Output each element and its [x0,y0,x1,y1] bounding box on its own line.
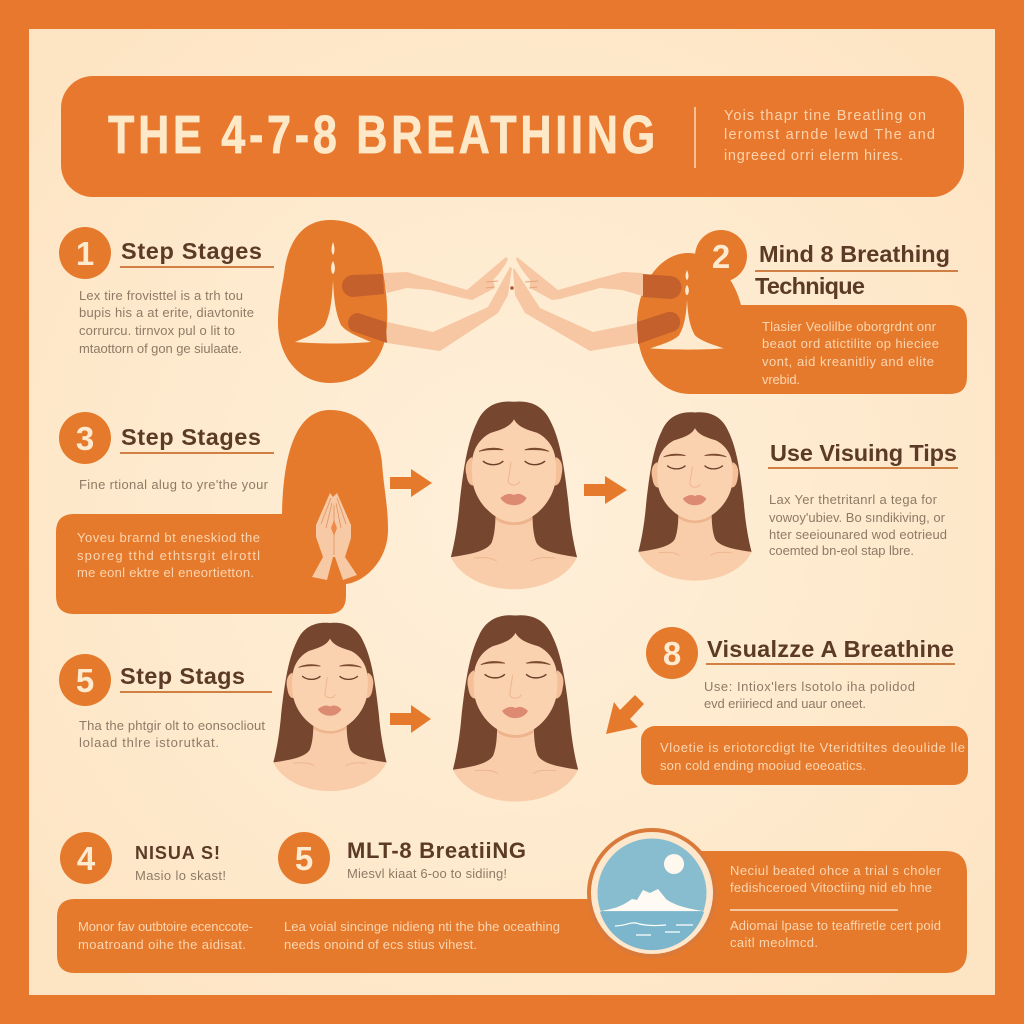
step 2 badge: 2 [712,238,730,275]
arrow 4 diagonal [606,695,644,734]
step 1 body [79,288,254,356]
face 1 [451,402,577,589]
header description: Yois thapr tine Breatling on [724,108,926,124]
step 1 badge: 1 [76,235,94,272]
arrow 3 [390,705,431,733]
arrow 1 [390,469,432,497]
step 4 badge: 4 [77,840,96,877]
face 4 [453,615,578,802]
left column text: Monor fav outbtoire ecenccote- [78,919,253,934]
bottom panel [57,851,967,973]
header description [724,108,935,164]
step 4 heading: NISUA S! [135,843,220,863]
step 8 heading: Visualzze A Breathine [707,636,954,662]
panel text [77,530,260,580]
tips body: hter seeiounared wod eotrieud [769,527,947,542]
step 3 body: Fine rtional alug to yre'the your [79,477,269,492]
face 3 [273,623,387,791]
right column text: caitl meolmcd. [730,935,818,950]
step 5 body: lolaad thlre istorutkat. [79,735,219,750]
panel text [762,319,939,387]
step 1 body: Lex tire frovisttel is a trh tou [79,288,243,303]
step 2 badge [695,230,747,282]
step 4 badge [60,832,112,884]
right column text [730,863,942,950]
icon: mountain and sea [587,828,717,958]
tips body: Lax Yer thetritanrl a tega for [769,492,938,507]
tips heading: Use Visuing Tips [770,440,957,466]
step 8 body: evd eriiriecd and uaur oneet. [704,696,866,711]
step 8 body [704,679,915,711]
step 8 panel: Vloetie is eriotorcdigt lte Vteridtiltes deoulide lle [660,740,965,755]
step 8 body: Use: Intiox'lers lsotolo iha polidod [704,679,915,694]
step 1 body: corrurcu. tirnvox pul o lit to [79,323,235,338]
step 5 badge [59,654,111,706]
step 5 body [79,718,265,750]
step 1 heading: Step Stages [121,238,262,264]
step 5 body: Tha the phtgir olt to eonsocliout [79,718,265,733]
middle column text: Lea voial sincinge nidieng nti the bhe oceathing [284,919,560,934]
step 8 badge: 8 [663,635,681,672]
panel text: me eonl ektre el eneortietton. [77,565,254,580]
step 1 blob with lamp [278,220,387,383]
header description: leromst arnde lewd The and [724,127,935,143]
title: THE 4-7-8 BREATHIING [108,106,655,165]
step 8 panel [641,726,968,785]
step 2 heading: Technique [755,273,865,299]
panel text: beaot ord atictilite op hieciee [762,336,939,351]
face 2 [638,412,752,581]
panel text: Tlasier Veolilbe oborgrdnt onr [762,319,937,334]
right arms [513,257,682,351]
step 4 sub text: Masio lo skast! [135,868,226,883]
left column text: moatroand oihe the aidisat. [78,937,246,952]
panel text: sporeg tthd ethtsrgit elrottl [77,548,260,563]
step 1 body: bupis his a at erite, diavtonite [79,305,254,320]
tips body: coemted bn-eol stap lbre. [769,543,914,558]
arrow 2 [584,476,627,504]
step 2 heading [755,241,958,299]
icon: praying hands [312,493,357,580]
step 1 badge [59,227,111,279]
step 5b badge: 5 [295,840,313,877]
step 3 panel and blob [56,410,388,614]
right column text: Neciul beated ohce a trial s choler [730,863,942,878]
panel text: vrebid. [762,372,800,387]
left column text [78,919,253,952]
step 5b heading: MLT-8 BreatiiNG [347,838,526,863]
middle column text [284,919,560,952]
step 5 badge: 5 [76,662,94,699]
middle column text: needs onoind of ecs stius vihest. [284,937,477,952]
header description: ingreeed orri elerm hires. [724,148,903,164]
step 3 badge: 3 [76,420,94,457]
tips body: vowoy'ubiev. Bo sındikiving, or [769,510,946,525]
step 2 heading: Mind 8 Breathing [759,241,950,267]
step 8 badge [646,627,698,679]
step 1 body: mtaottorn of gon ge siulaate. [79,341,242,356]
step 3 badge [59,412,111,464]
panel text: Yoveu brarnd bt eneskiod the [77,530,260,545]
step 8 panel: son cold ending mooiud eoeoatics. [660,758,866,773]
arms reaching together [342,257,682,351]
step 2 panel with lamp [637,253,967,394]
right column text: fedishceroed Vitoctiing nid eb hne [730,880,932,895]
panel text: vont, aid kreanitliy and elite [762,354,934,369]
step 3 heading: Step Stages [121,424,261,450]
step 5b sub text: Miesvl kiaat 6-oo to sidiing! [347,866,507,881]
header banner [61,76,964,197]
right column text: Adiomai lpase to teaffiretle cert poid [730,918,941,933]
left arms [342,257,512,351]
step 5b badge [278,832,330,884]
step 5 heading: Step Stags [120,663,245,689]
tips body [769,492,947,558]
